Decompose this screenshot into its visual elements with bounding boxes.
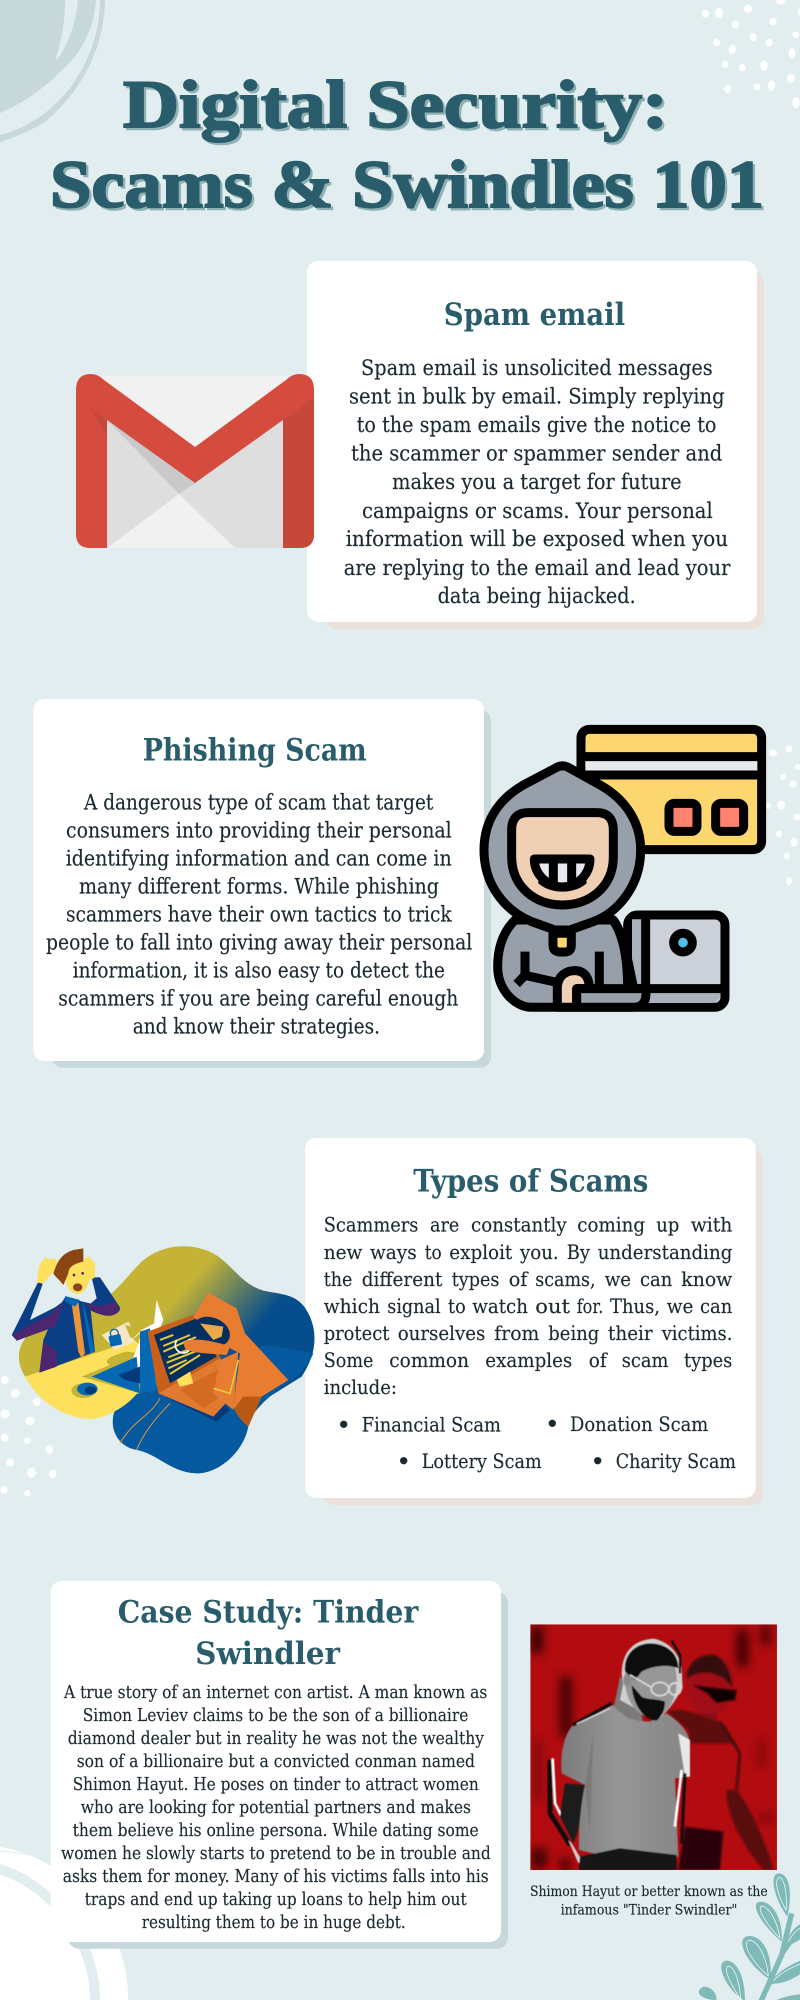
- text: types of scams body: know: [681, 1267, 732, 1291]
- text: spam email body: campaigns or scams. Your personal: [362, 499, 713, 523]
- text: types of scams body: common: [389, 1348, 469, 1372]
- text: types of scams body: watch: [472, 1294, 528, 1318]
- text: spam email body: data being hijacked.: [438, 584, 636, 608]
- text: case study body: asks them for money. Many of his victims falls into his: [63, 1866, 489, 1887]
- mouse: [71, 1383, 98, 1398]
- text: case study body: women he slowly starts to pretend to be in trouble and: [61, 1843, 491, 1864]
- text: types of scams body: to: [448, 1294, 466, 1318]
- halo: [620, 1639, 683, 1720]
- blue lower blob: [113, 1345, 313, 1473]
- hand: [557, 971, 589, 1007]
- decoration: top-left brush circle: [0, 0, 105, 142]
- text: phishing body: people to fall into giving away their personal: [46, 930, 473, 954]
- list: scam types: [340, 1412, 736, 1473]
- victim: [12, 1248, 120, 1373]
- text: case study body: Simon Leviev claims to be the son of a billionaire: [83, 1705, 468, 1726]
- hoodie body: [498, 918, 633, 1007]
- text: spam email body: the scammer or spammer sender and: [351, 442, 722, 466]
- text: spam email body: to the spam emails give the notice to: [357, 413, 716, 437]
- list: scam types: Financial Scam: [362, 1413, 501, 1437]
- text: case study body: traps and end up taking up loans to help him out: [85, 1889, 467, 1910]
- text: case study body: them believe his online persona. While dating some: [73, 1820, 479, 1841]
- text: types of scams body: their: [608, 1321, 653, 1345]
- text: types of scams body: Thus,: [610, 1294, 660, 1318]
- text: phishing body: information, it is also easy to detect the: [73, 958, 445, 982]
- blob background: [19, 1246, 315, 1407]
- keyboard: [577, 989, 646, 1007]
- icon: hooded hacker with credit card and laptop: [484, 729, 762, 1007]
- text: spam email body: [344, 356, 731, 608]
- text: types of scams body: constantly: [471, 1213, 567, 1237]
- white burst: [125, 1300, 163, 1368]
- caption: photo: [530, 1884, 768, 1918]
- text: case study body: A true story of an internet con artist. A man known as: [63, 1682, 487, 1703]
- title text: Scams & Swindles 101: [50, 146, 764, 222]
- text: types of scams body: understanding: [598, 1240, 733, 1264]
- panel: phishing scam: [33, 699, 491, 1068]
- text: case study body: who are looking for potential partners and makes: [81, 1797, 471, 1818]
- text: types of scams body: examples: [485, 1348, 572, 1372]
- text: types of scams body: protect: [324, 1321, 389, 1345]
- decoration: left-side dots: [0, 1376, 56, 1497]
- text: types of scams body: different: [362, 1267, 442, 1291]
- text: types of scams body: for.: [577, 1294, 603, 1318]
- caption: photo: Shimon Hayut or better known as the: [530, 1884, 768, 1900]
- title: [50, 66, 766, 224]
- decoration: bottom-left white brush circle: [0, 1847, 128, 2000]
- text: types of scams body: scams,: [535, 1267, 596, 1291]
- decoration: right-side dots: [765, 746, 800, 885]
- text: types of scams body: of: [589, 1348, 608, 1372]
- collar: [553, 933, 571, 952]
- text: phishing body: scammers have their own tactics to trick: [66, 902, 452, 926]
- title text: Digital Security:: [123, 66, 668, 142]
- text: types of scams body: up: [656, 1213, 679, 1237]
- hood: [484, 766, 641, 930]
- text: spam email body: are replying to the email and lead your: [344, 556, 731, 580]
- text: types of scams body: signal: [387, 1294, 441, 1318]
- title shadow: Digital Security:: [126, 68, 670, 144]
- text: spam email body: makes you a target for future: [392, 470, 682, 494]
- laptop: [628, 915, 725, 1007]
- heading: case study: Case Study: Tinder: [118, 1595, 419, 1631]
- text: types of scams body: being: [548, 1321, 599, 1345]
- text: types of scams body: you.: [519, 1240, 559, 1264]
- decoration: top-right dots: [702, 0, 800, 108]
- text: types of scams body: coming: [577, 1213, 645, 1237]
- title text: [50, 66, 764, 222]
- text: types of scams body: new: [324, 1240, 362, 1264]
- text: types of scams body: types: [452, 1267, 499, 1291]
- text: types of scams body: Scammers: [324, 1213, 418, 1237]
- text: types of scams body: Some: [324, 1348, 373, 1372]
- text: types of scams body: [324, 1213, 733, 1399]
- hacker laptop: [148, 1313, 235, 1422]
- decoration: bottom-right leaf branch: [699, 1873, 800, 2000]
- text: types of scams body: which: [324, 1294, 380, 1318]
- photo: Shimon Hayut on red background: [530, 1624, 777, 1872]
- caption: photo: infamous "Tinder Swindler": [561, 1902, 737, 1918]
- heading: case study: Swindler: [195, 1636, 341, 1672]
- blurred background blotches: [530, 1625, 773, 1872]
- text: types of scams body: can: [700, 1294, 732, 1318]
- text: case study body: Shimon Hayut. He poses on tinder to attract women: [73, 1774, 479, 1795]
- icon: gmail envelope: [76, 374, 314, 548]
- text: types of scams body: to: [425, 1240, 442, 1264]
- list: scam types: Donation Scam: [570, 1412, 708, 1436]
- text: phishing body: identifying information and can come in: [66, 846, 452, 870]
- text: spam email body: sent in bulk by email. Simply replying: [349, 384, 725, 408]
- text: types of scams body: include:: [324, 1375, 397, 1399]
- text: case study body: diamond dealer but in reality he was not the wealthy: [68, 1728, 485, 1749]
- text: phishing body: scammers if you are being careful enough: [58, 986, 458, 1010]
- title shadow: [52, 68, 766, 224]
- illustration: scam victim and hacker at laptops: [12, 1246, 315, 1473]
- text: types of scams body: scam: [622, 1348, 668, 1372]
- text: types of scams body: ourselves: [398, 1321, 485, 1345]
- main figure: [550, 1639, 690, 1870]
- panel: spam email: [307, 261, 764, 629]
- text: types of scams body: are: [430, 1213, 459, 1237]
- teeth: [534, 859, 590, 892]
- text: spam email body: Spam email is unsolicited messages: [361, 356, 713, 380]
- text: types of scams body: out: [535, 1294, 570, 1318]
- yellow desk: [25, 1338, 145, 1419]
- panel: types of scams: [305, 1138, 763, 1505]
- credit card: [581, 729, 762, 850]
- text: types of scams body: from: [494, 1321, 539, 1345]
- panel: case study tinder swindler: [51, 1581, 508, 1949]
- text: types of scams body: with: [691, 1213, 733, 1237]
- list: scam types: Lottery Scam: [422, 1449, 542, 1473]
- lock note: [102, 1322, 140, 1350]
- text: types of scams body: we: [605, 1267, 631, 1291]
- text: types of scams body: the: [324, 1267, 352, 1291]
- text: types of scams body: can: [640, 1267, 672, 1291]
- title shadow: Scams & Swindles 101: [52, 148, 766, 224]
- text: types of scams body: of: [509, 1267, 529, 1291]
- text: types of scams body: victims.: [661, 1321, 732, 1345]
- text: phishing body: [46, 790, 473, 1038]
- text: phishing body: consumers into providing their personal: [66, 818, 452, 842]
- heading: types of scams: Types of Scams: [413, 1164, 648, 1200]
- heading: case study: [118, 1595, 419, 1672]
- text: spam email body: information will be exposed when you: [346, 527, 728, 551]
- text: case study body: resulting them to be in huge debt.: [142, 1912, 406, 1933]
- text: phishing body: A dangerous type of scam that target: [83, 790, 434, 814]
- hacker: [177, 1293, 288, 1427]
- text: types of scams body: By: [567, 1240, 591, 1264]
- text: case study body: [61, 1682, 491, 1933]
- text: types of scams body: exploit: [449, 1240, 512, 1264]
- text: types of scams body: types: [684, 1348, 732, 1372]
- text: phishing body: and know their strategies.: [133, 1014, 380, 1038]
- text: case study body: son of a billionaire but a convicted conman named: [77, 1751, 475, 1772]
- list: scam types: Charity Scam: [616, 1449, 736, 1473]
- heading: spam email: Spam email: [444, 297, 625, 333]
- face: [512, 813, 613, 905]
- text: phishing body: many different forms. While phishing: [79, 874, 439, 898]
- victim laptop: [92, 1328, 157, 1393]
- text: types of scams body: we: [667, 1294, 693, 1318]
- cables: [120, 1398, 170, 1450]
- man in background: [667, 1655, 773, 1870]
- heading: phishing scam: Phishing Scam: [143, 733, 367, 769]
- text: types of scams body: ways: [370, 1240, 417, 1264]
